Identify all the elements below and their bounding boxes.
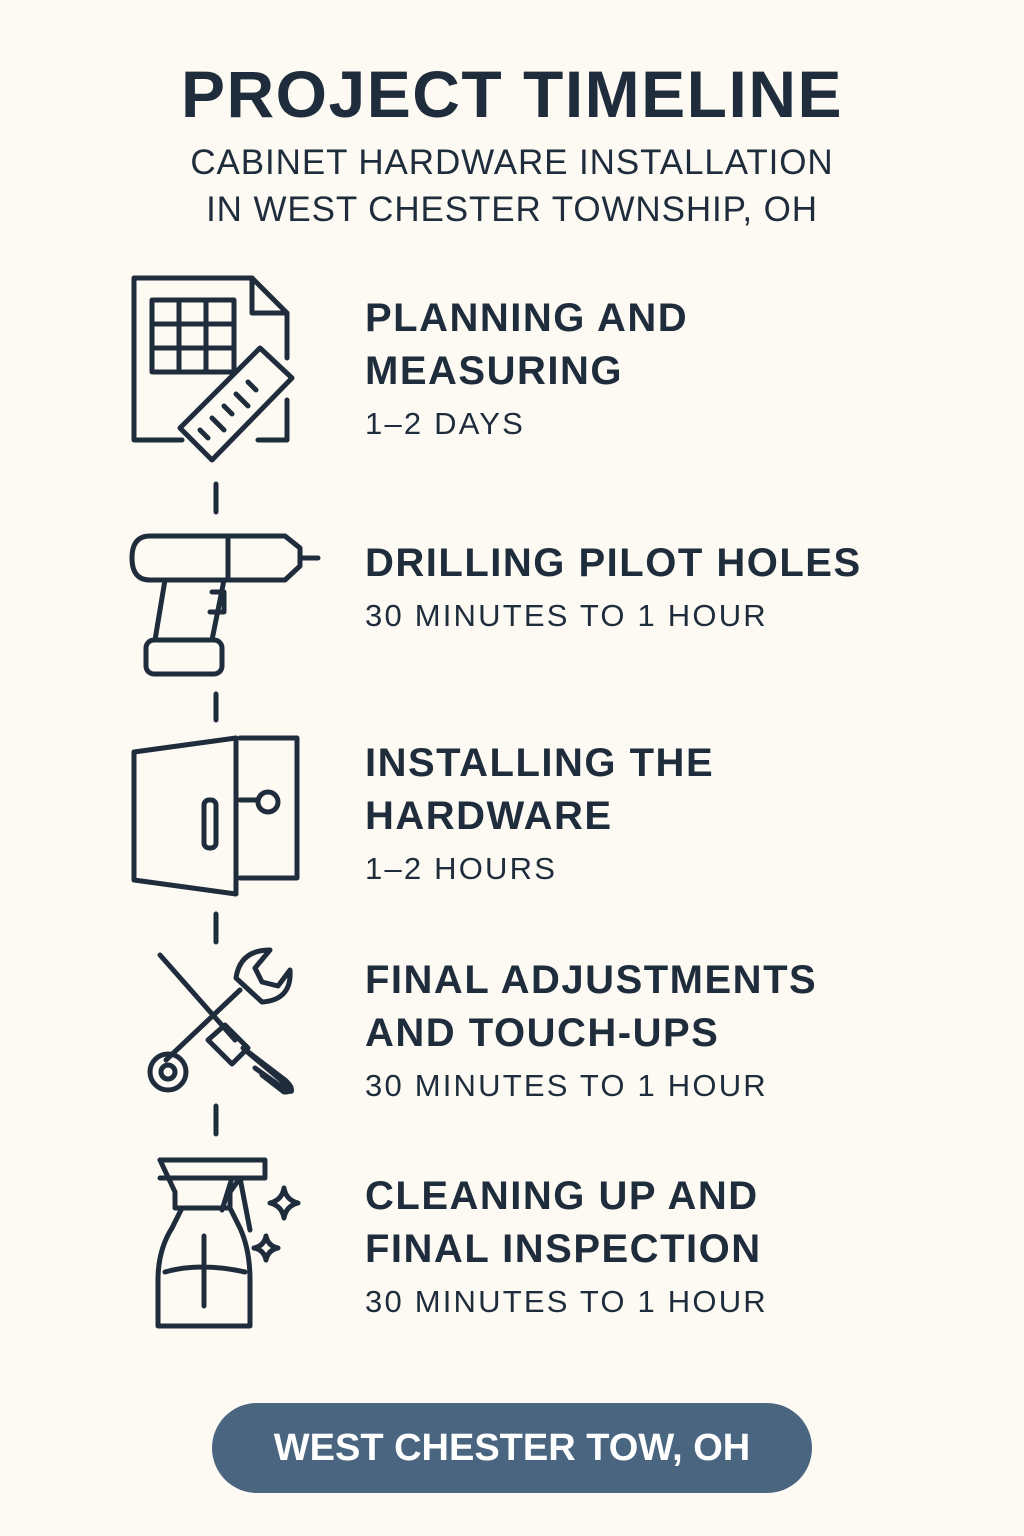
subtitle xyxy=(190,143,834,229)
step 4 text xyxy=(365,958,817,1103)
subtitle: CABINET HARDWARE INSTALLATION xyxy=(190,143,834,182)
subtitle: IN WEST CHESTER TOWNSHIP, OH xyxy=(206,190,818,229)
step 4 text: 30 MINUTES TO 1 HOUR xyxy=(365,1068,768,1103)
location button xyxy=(212,1403,812,1493)
step 4 text: AND TOUCH-UPS xyxy=(365,1011,719,1055)
location button: WEST CHESTER TOW, OH xyxy=(274,1427,750,1469)
step 3 text: INSTALLING THE xyxy=(365,741,714,785)
step 3 text: 1–2 HOURS xyxy=(365,851,557,886)
icon: tools xyxy=(150,950,292,1092)
step 1 text xyxy=(365,296,688,441)
icon: cabinet door xyxy=(134,738,297,894)
icon: drill xyxy=(132,536,318,674)
step 1 text: 1–2 DAYS xyxy=(365,406,525,441)
step 1 text: PLANNING AND xyxy=(365,296,688,340)
title: PROJECT TIMELINE xyxy=(181,57,843,131)
step 5 text: CLEANING UP AND xyxy=(365,1174,759,1218)
step 2 text: DRILLING PILOT HOLES xyxy=(365,541,862,585)
step 5 text: 30 MINUTES TO 1 HOUR xyxy=(365,1284,768,1319)
icon: plan with ruler xyxy=(134,278,292,460)
step 2 text: 30 MINUTES TO 1 HOUR xyxy=(365,598,768,633)
connectors xyxy=(214,484,218,1134)
step 4 text: FINAL ADJUSTMENTS xyxy=(365,958,817,1002)
step 5 text xyxy=(365,1174,768,1319)
step 3 text xyxy=(365,741,714,886)
step 5 text: FINAL INSPECTION xyxy=(365,1227,762,1271)
step 3 text: HARDWARE xyxy=(365,794,613,838)
step 2 text xyxy=(365,541,862,633)
step 1 text: MEASURING xyxy=(365,349,623,393)
icon: spray bottle xyxy=(158,1160,298,1326)
